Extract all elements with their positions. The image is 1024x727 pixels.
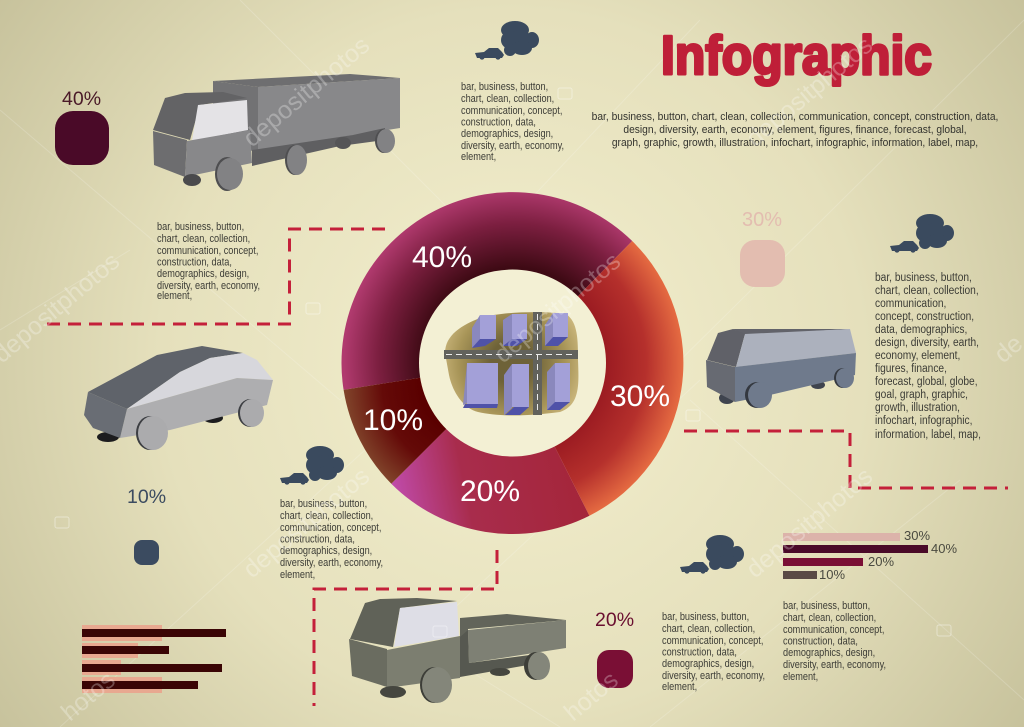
text block top centre: bar, business, button,	[461, 81, 548, 93]
text block right: communication,	[875, 297, 946, 310]
text block bottom right: bar, business, button,	[783, 600, 870, 612]
text block left: diversity, earth, economy,	[157, 280, 260, 292]
text block left: element,	[157, 290, 192, 302]
text block centre left: construction, data,	[280, 534, 355, 546]
label 30%: 30%	[610, 380, 670, 413]
text block centre left: element,	[280, 569, 315, 581]
text block right: goal, graph, graphic,	[875, 388, 968, 401]
text block right: information, label, map,	[875, 428, 981, 441]
icon: smoke top	[475, 21, 539, 60]
text block right: chart, clean, collection,	[875, 284, 979, 297]
stat: 10%	[127, 486, 166, 565]
text block top centre: element,	[461, 151, 496, 163]
text block centre left: demographics, design,	[280, 545, 372, 557]
text block right: design, diversity, earth,	[875, 336, 979, 349]
text block right: bar, business, button,	[875, 271, 972, 284]
car	[84, 346, 273, 450]
stat: 20%	[595, 609, 634, 688]
watermark: depositphotos	[741, 462, 878, 584]
text block right: concept, construction,	[875, 310, 974, 323]
dashed connector right	[684, 431, 1008, 488]
text block top centre: demographics, design,	[461, 128, 553, 140]
text block bottom centre	[662, 611, 765, 693]
text block bottom right: element,	[783, 671, 818, 683]
bar 10%	[783, 567, 845, 582]
watermark: depositphotos	[489, 247, 626, 369]
text block right: data, demographics,	[875, 323, 967, 336]
icon: smoke right	[890, 214, 954, 253]
text block bottom right: chart, clean, collection,	[783, 612, 876, 624]
intro text: design, diversity, earth, economy, element, figures, finance, forecast, global,	[623, 124, 967, 136]
text block top centre: communication, concept,	[461, 105, 562, 117]
stat: 40%	[55, 88, 109, 165]
title: Infographic	[661, 24, 932, 86]
text block left: chart, clean, collection,	[157, 233, 250, 245]
label 20%: 20%	[460, 475, 520, 508]
watermark: hotos	[559, 666, 624, 727]
bar 20%: 20%	[868, 554, 894, 569]
text block centre left: chart, clean, collection,	[280, 510, 373, 522]
watermark: hotos	[56, 666, 121, 727]
text block bottom centre: communication, concept,	[662, 635, 763, 647]
text block left: bar, business, button,	[157, 221, 244, 233]
van	[706, 329, 856, 408]
text block top centre	[461, 81, 564, 163]
stat: 30%: 30%	[742, 209, 782, 231]
text block left: communication, concept,	[157, 245, 258, 257]
watermark: depositphotos	[741, 31, 878, 153]
text block right: economy, element,	[875, 349, 960, 362]
label 40%: 40%	[412, 241, 472, 274]
text block bottom right: communication, concept,	[783, 624, 884, 636]
donut centre	[419, 270, 606, 456]
label 10%: 10%	[363, 404, 423, 437]
bar 30%: 30%	[904, 528, 930, 543]
stat: 10%: 10%	[127, 486, 166, 508]
intro text: graph, graphic, growth, illustration, infochart, infographic, information, label, map,	[612, 137, 978, 149]
text block bottom centre: element,	[662, 681, 697, 693]
segment 30%	[554, 241, 683, 516]
bar 20%	[783, 554, 894, 569]
flatbed truck	[349, 598, 566, 703]
text block bottom right: demographics, design,	[783, 647, 875, 659]
text block bottom right: construction, data,	[783, 636, 858, 648]
intro text: bar, business, button, chart, clean, collection, communication, concept, construction, data,	[592, 111, 998, 123]
dashed connector bottom	[314, 550, 497, 706]
segment 20%	[391, 429, 589, 534]
text block right: forecast, global, globe,	[875, 375, 978, 388]
bar 30%	[783, 528, 930, 543]
text block centre left: bar, business, button,	[280, 498, 367, 510]
text block left: construction, data,	[157, 257, 232, 269]
swatch 20%	[597, 650, 633, 688]
text block right: growth, illustration,	[875, 401, 960, 414]
stat: 30%	[740, 209, 785, 287]
donut chart	[341, 192, 683, 534]
text block right	[875, 271, 981, 441]
text block centre left	[280, 498, 383, 581]
text block bottom centre: bar, business, button,	[662, 611, 749, 623]
icon: smoke bottom right	[680, 535, 744, 574]
text block right: figures, finance,	[875, 362, 947, 375]
intro text	[592, 111, 998, 149]
text block left: demographics, design,	[157, 268, 249, 280]
watermark: depositphotos	[238, 462, 375, 584]
text block bottom right: diversity, earth, economy,	[783, 659, 886, 671]
text block left	[157, 221, 260, 302]
text block top centre: diversity, earth, economy,	[461, 140, 564, 152]
stat: 40%: 40%	[62, 88, 101, 110]
text block right: infochart, infographic,	[875, 414, 972, 427]
text block bottom centre: demographics, design,	[662, 658, 754, 670]
bar chart bottom left	[82, 625, 226, 693]
bar 40%	[783, 541, 957, 556]
icon: city map	[444, 312, 578, 415]
text block bottom centre: diversity, earth, economy,	[662, 670, 765, 682]
text block top centre: construction, data,	[461, 117, 536, 129]
text block centre left: communication, concept,	[280, 522, 381, 534]
text block bottom centre: construction, data,	[662, 647, 737, 659]
swatch 10%	[134, 540, 159, 565]
swatch 40%	[55, 111, 109, 165]
bar chart top right	[783, 528, 957, 582]
text block bottom centre: chart, clean, collection,	[662, 623, 755, 635]
segment 10%	[344, 378, 447, 484]
stat: 20%: 20%	[595, 609, 634, 631]
text block bottom right	[783, 600, 886, 683]
bar 40%: 40%	[931, 541, 957, 556]
text block centre left: diversity, earth, economy,	[280, 557, 383, 569]
segment 40%	[341, 192, 632, 390]
dashed connector top left	[40, 229, 385, 324]
swatch 30%	[740, 240, 785, 287]
watermark: depositphotos	[238, 31, 375, 153]
text block top centre: chart, clean, collection,	[461, 93, 554, 105]
icon: smoke centre left	[280, 446, 344, 485]
bar 10%: 10%	[819, 567, 845, 582]
truck	[153, 74, 400, 191]
